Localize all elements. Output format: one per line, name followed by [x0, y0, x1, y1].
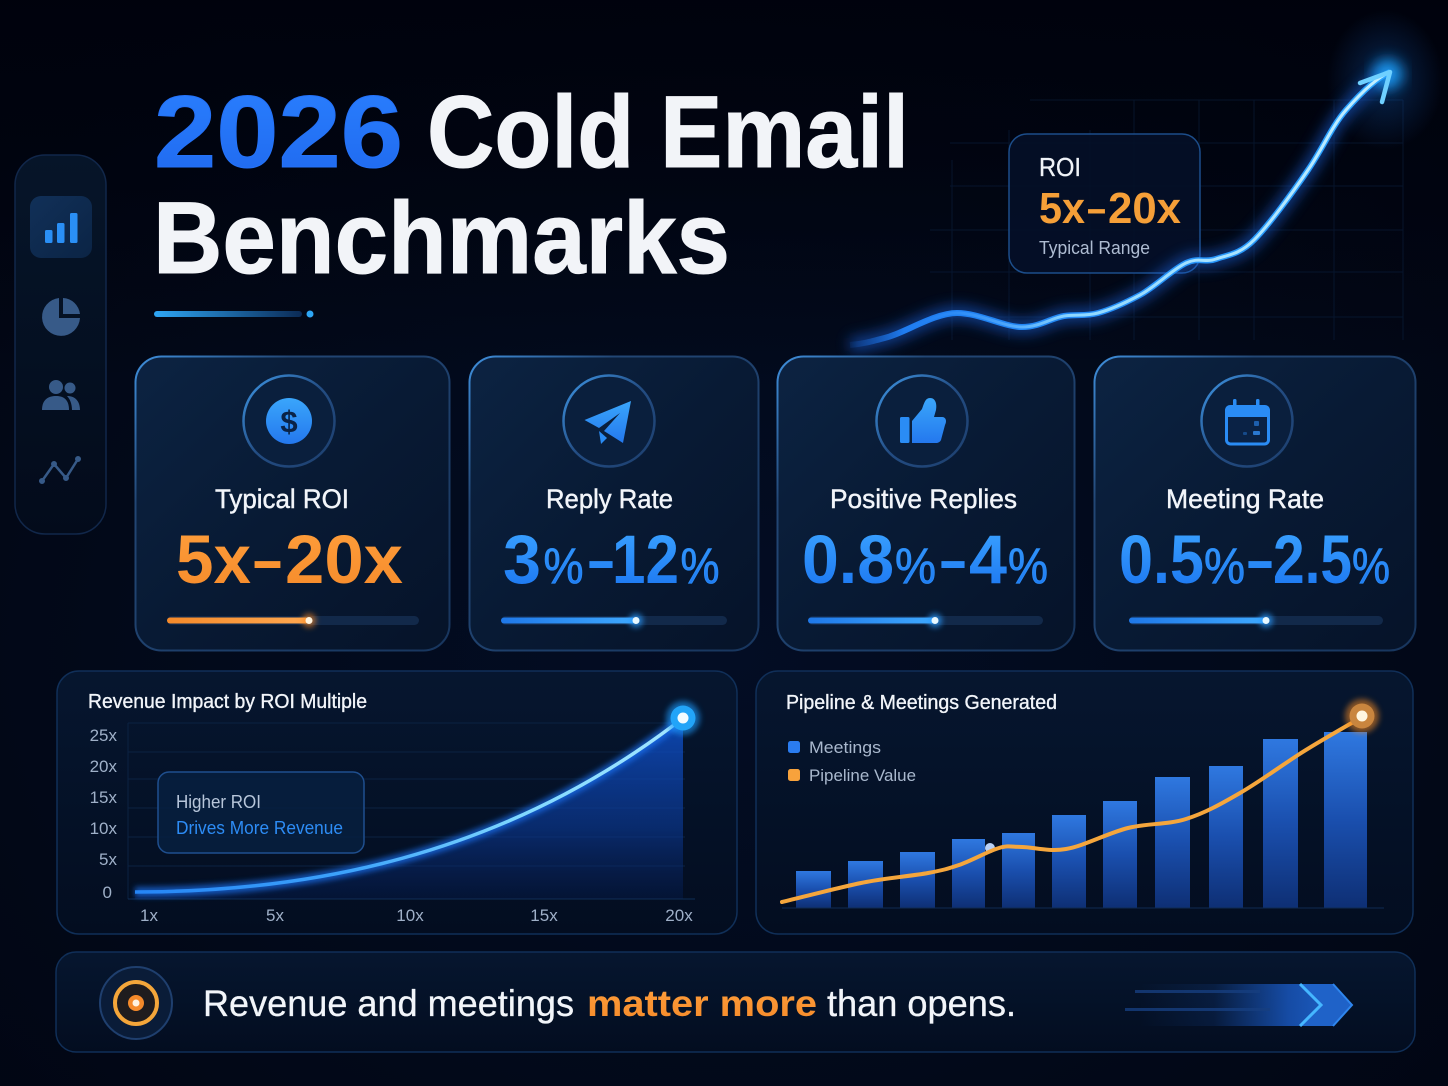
icon: pie chart	[42, 298, 80, 336]
callout: ROI range: 20x	[1108, 184, 1182, 233]
y axis labels: 0	[103, 883, 112, 902]
callout: ROI range: 5x	[1039, 184, 1085, 233]
icon: paper plane	[564, 376, 654, 466]
value: %	[895, 538, 936, 594]
panel: Reply Rate card	[470, 356, 758, 650]
icon: bar chart (active)	[30, 196, 92, 258]
x axis labels: 15x	[530, 906, 558, 925]
x axis labels: 1x	[140, 906, 158, 925]
value: 2.5	[1273, 521, 1352, 598]
sidebar navigation	[15, 155, 106, 534]
panel: Revenue Impact by ROI Multiple	[57, 671, 737, 934]
value: –	[1247, 521, 1273, 598]
hero chart: rising ROI line with arrow	[850, 10, 1443, 345]
value: –	[588, 521, 614, 598]
panel: Typical ROI card	[136, 356, 450, 650]
value: 12	[612, 521, 679, 598]
bar chart: meetings	[796, 732, 1367, 908]
progress bar	[808, 614, 1043, 628]
value: %	[680, 538, 720, 594]
value: %	[1008, 538, 1048, 594]
value	[176, 521, 403, 598]
value	[802, 521, 1048, 598]
value	[1119, 521, 1390, 598]
value: 3	[503, 521, 541, 598]
icon: calendar	[1202, 376, 1292, 466]
callout: ROI range: –	[1087, 184, 1106, 233]
value: –	[253, 521, 282, 598]
y axis labels: 10x	[90, 819, 117, 838]
x axis labels: 5x	[266, 906, 284, 925]
callout: higher ROI: Drives More Revenue	[176, 818, 343, 838]
value: –	[940, 521, 966, 598]
y axis labels: 25x	[90, 726, 117, 745]
panel: Positive Replies card	[778, 356, 1074, 650]
y axis labels: 15x	[90, 788, 117, 807]
icon: target	[100, 967, 172, 1039]
end point marker	[1345, 699, 1379, 733]
value: 5x	[176, 521, 251, 598]
text: Revenue and meetings	[203, 983, 574, 1024]
x axis labels: 20x	[665, 906, 693, 925]
icon: dollar coin	[244, 376, 334, 466]
panel: Meeting Rate card	[1094, 356, 1416, 650]
title: Benchmarks	[153, 181, 730, 295]
value: %	[1352, 538, 1390, 594]
title	[153, 75, 909, 295]
y axis labels: 5x	[99, 850, 117, 869]
title: Cold Email	[427, 75, 909, 189]
progress bar	[1129, 614, 1383, 628]
x axis labels: 10x	[396, 906, 424, 925]
y axis labels: 20x	[90, 757, 117, 776]
callout: ROI range: ROI	[1039, 152, 1081, 182]
label: Reply Rate	[546, 484, 673, 514]
value: 0.8	[802, 521, 894, 598]
value: %	[1204, 538, 1245, 594]
small marker	[985, 843, 995, 853]
heading: Revenue Impact by ROI Multiple	[88, 691, 367, 713]
progress bar	[501, 614, 727, 628]
icon: dollar coin: $	[280, 404, 298, 439]
panel: Pipeline & Meetings Generated	[756, 671, 1413, 934]
title underline	[154, 310, 314, 318]
callout: ROI range	[1009, 134, 1200, 273]
legend: Pipeline Value	[809, 766, 916, 785]
value: %	[544, 538, 584, 594]
progress bar	[167, 614, 419, 628]
x axis labels	[140, 906, 693, 925]
value: 20x	[285, 521, 403, 598]
callout: higher ROI	[158, 772, 364, 853]
icon: trend line	[40, 456, 80, 484]
icon: people	[42, 380, 80, 410]
label: Positive Replies	[830, 484, 1017, 514]
value	[503, 521, 720, 598]
value: 0.5	[1119, 521, 1204, 598]
icon: thumbs up	[876, 376, 968, 466]
callout: ROI range: Typical Range	[1039, 238, 1150, 258]
line chart: pipeline value	[782, 717, 1362, 902]
legend: Meetings	[809, 738, 881, 757]
y axis labels	[90, 726, 117, 902]
label: Meeting Rate	[1166, 484, 1324, 514]
legend	[788, 738, 916, 785]
callout banner: takeaway: than opens.	[827, 983, 1016, 1024]
end point marker	[666, 701, 700, 735]
callout: higher ROI: Higher ROI	[176, 792, 261, 812]
heading: Pipeline & Meetings Generated	[786, 692, 1057, 714]
callout banner: takeaway: matter more	[587, 983, 817, 1024]
callout banner: takeaway	[56, 952, 1415, 1052]
label: Typical ROI	[215, 484, 349, 514]
title: 2026	[154, 75, 403, 189]
line chart	[128, 701, 700, 899]
value: 4	[969, 521, 1007, 598]
arrow	[1125, 984, 1352, 1026]
